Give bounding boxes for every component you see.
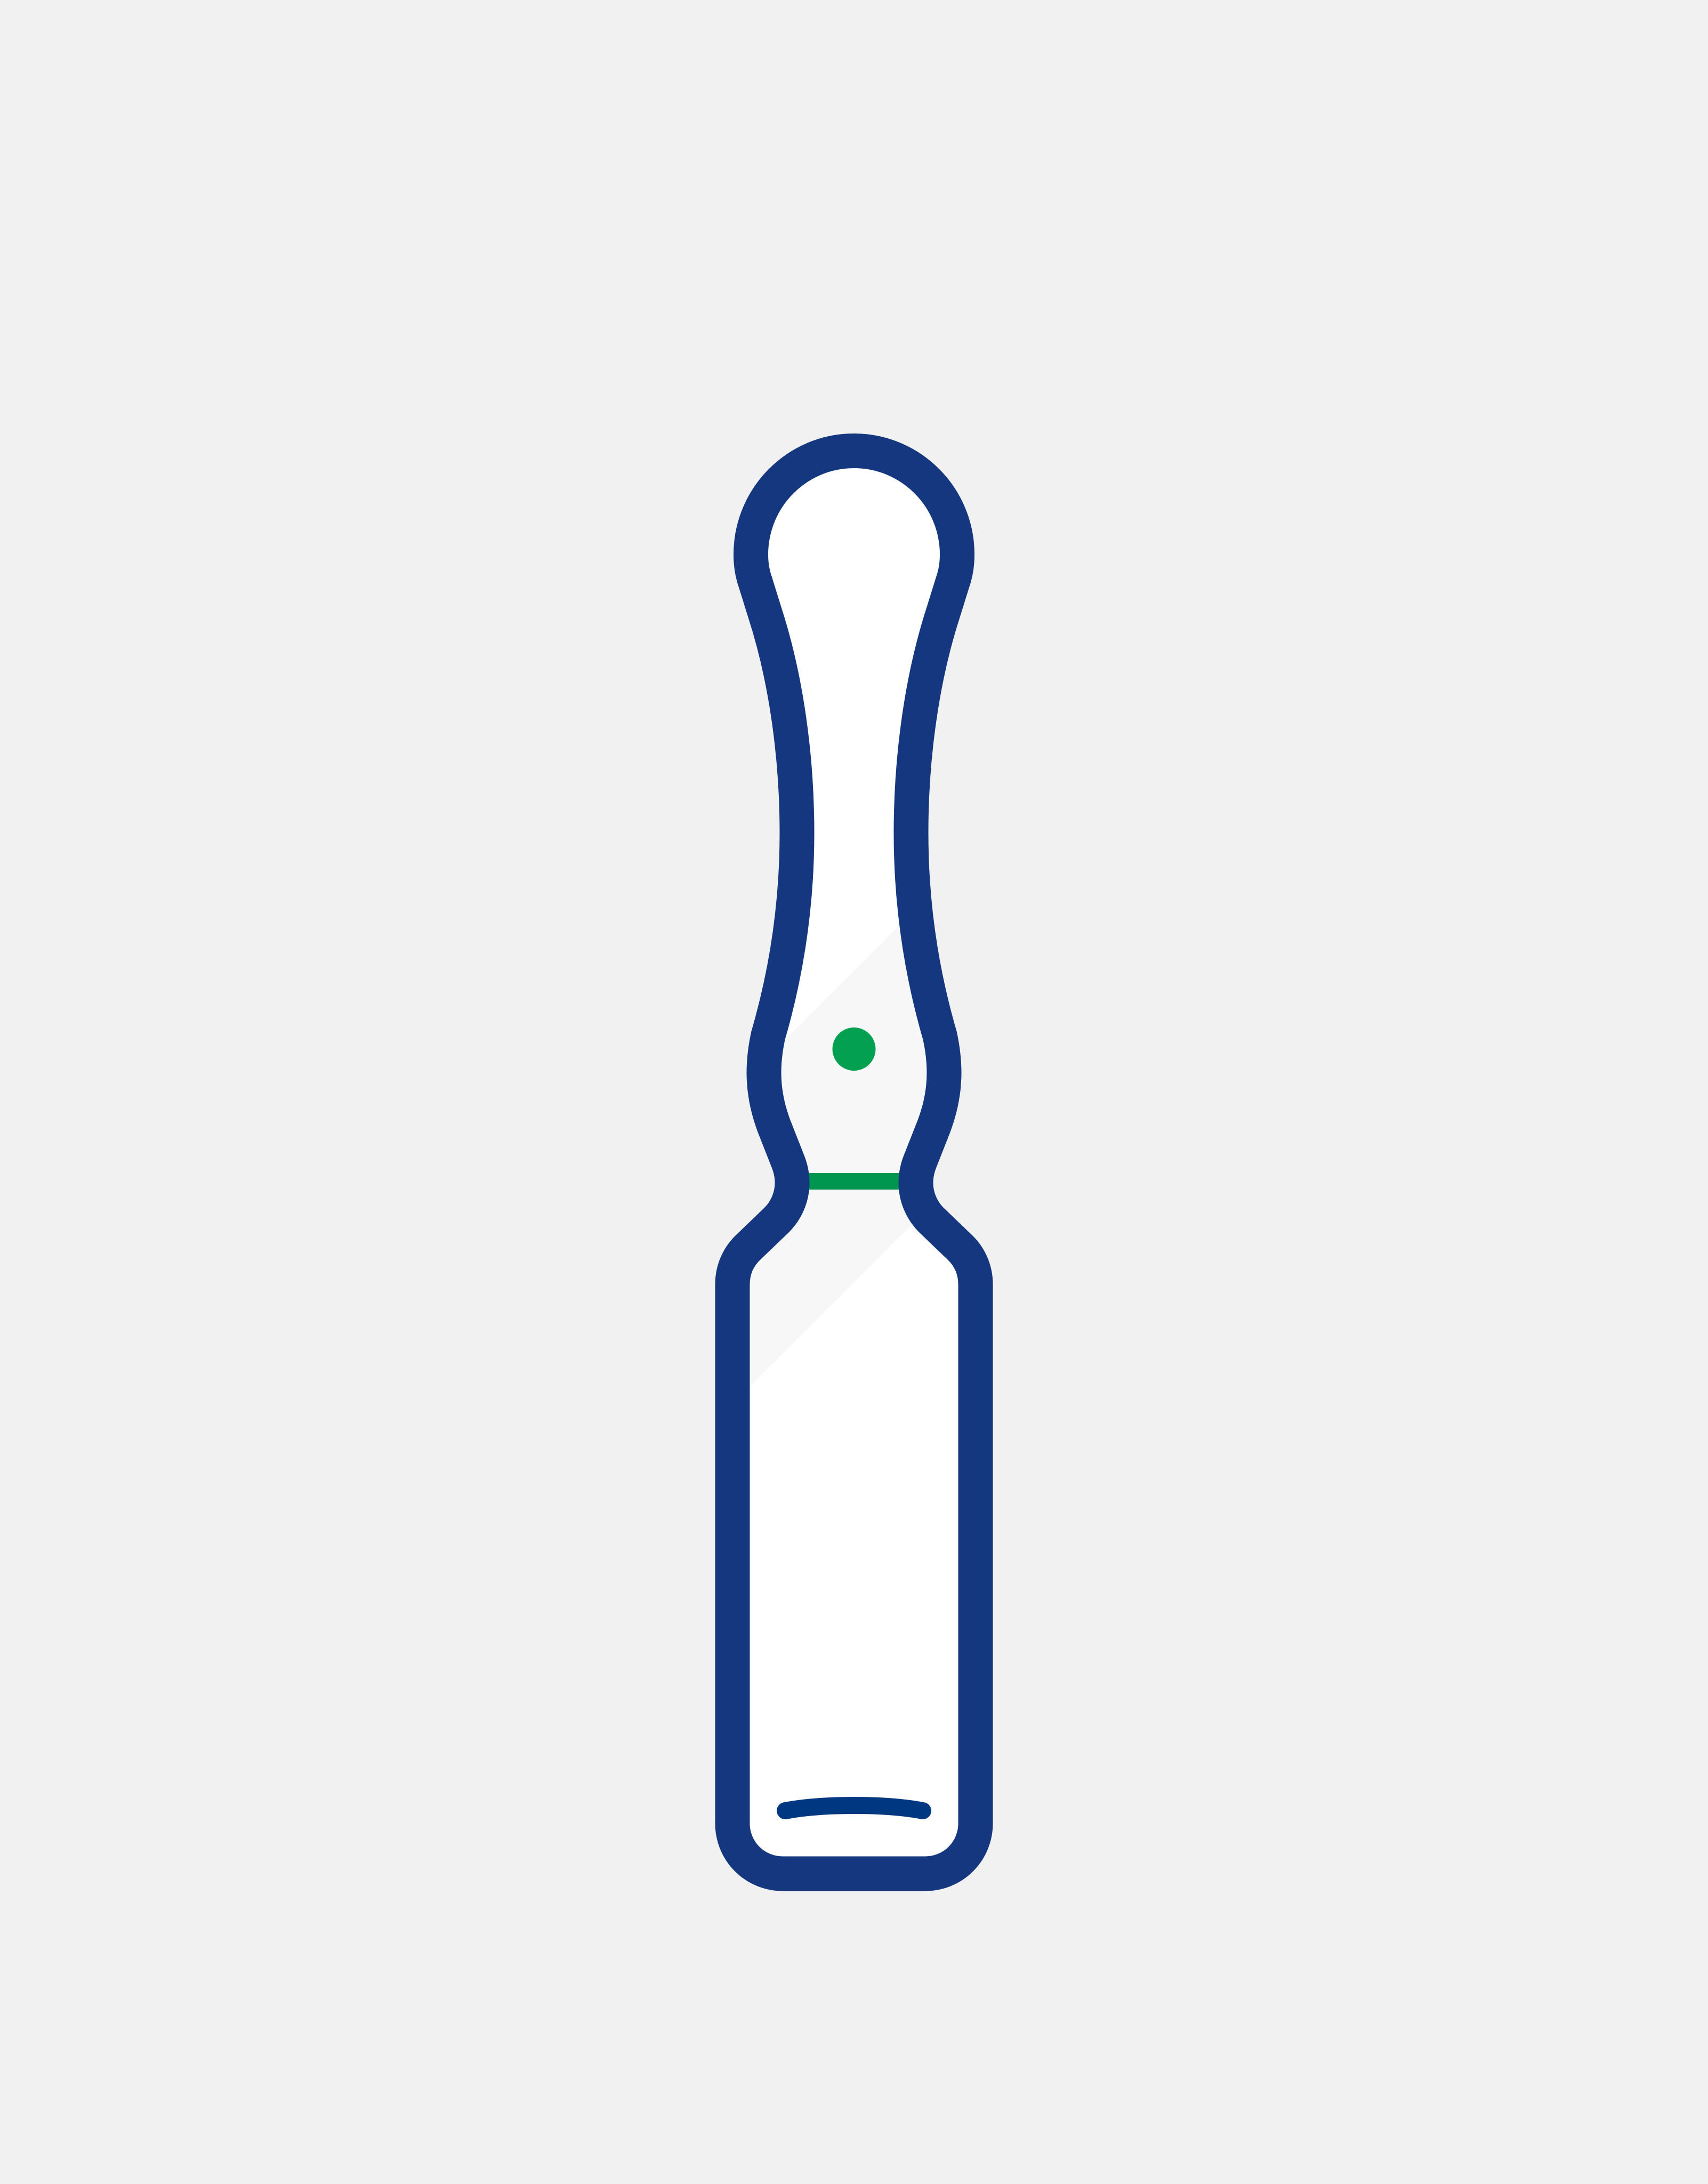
diagonal grey highlight band <box>693 812 1013 1443</box>
ampoule glass fill <box>732 451 976 1874</box>
illustration: ampoule on light grey background <box>715 433 993 1891</box>
ampoule <box>715 433 993 1891</box>
green break dot <box>833 1027 875 1071</box>
ampoule navy outline <box>732 451 976 1874</box>
green score band on neck <box>802 1173 906 1190</box>
curved base line <box>785 1805 923 1811</box>
